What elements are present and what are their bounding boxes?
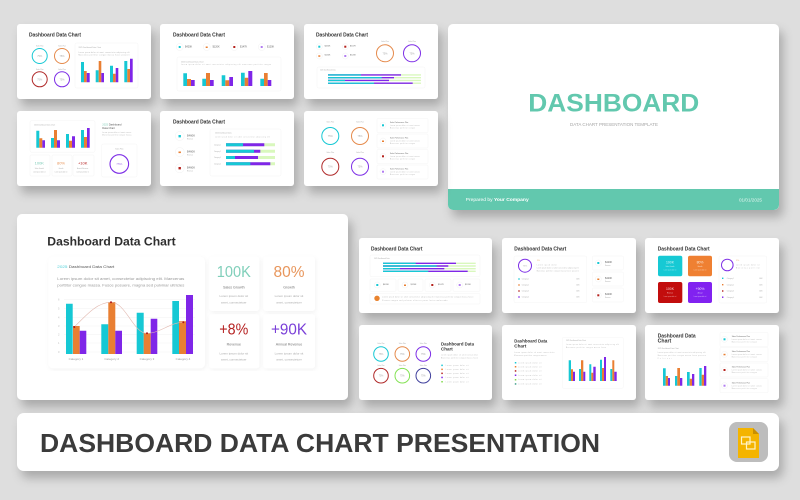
- slide thumbnail: six rings and list: Sales Plan: [377, 343, 385, 345]
- slide thumbnail: six rings and list: 75%: [421, 354, 426, 356]
- slide thumbnail: KPI row and bar chart: [160, 24, 294, 99]
- category labels: [69, 357, 191, 361]
- slide thumbnail: KPI column and horizontal bars: $460K: [187, 134, 195, 138]
- slide thumbnail: coloured KPI tiles and list: Dashboard Data Chart: [658, 247, 710, 253]
- slide thumbnail: rings and bar chart: Lorem ipsum dolor sit amet consectetur adipiscing elit: [78, 51, 130, 54]
- KPI card: annual revenue: [263, 314, 315, 368]
- slide thumbnail: bar chart, KPI trio and ring: Maecenas porttitor congue massa: [102, 134, 132, 136]
- slide thumbnail: six rings and list: Sales Plan: [399, 365, 406, 367]
- slide thumbnail: coloured KPI tiles and list: Revenue: [667, 292, 673, 294]
- slide thumbnail: ring with list and KPI column: 100K: [576, 291, 580, 293]
- slide thumbnail: KPI column and horizontal bars: Category 2: [214, 150, 221, 153]
- slide thumbnail: stacked bars, KPI row and note: $147K: [438, 284, 444, 286]
- y axis labels: 5: [58, 307, 60, 311]
- slide thumbnail: six rings and list: Lorem ipsum dolor sit: [446, 380, 469, 384]
- slide thumbnail: rings and text rows: Sales Performance Plan: [390, 168, 408, 170]
- slide thumbnail: bar chart and text rows: Maecenas porttitor congue: [732, 371, 757, 374]
- y axis labels: 4: [58, 315, 60, 319]
- slide thumbnail: stacked bars, KPI row and note: $120K: [410, 284, 417, 286]
- slide thumbnail: ring with list and KPI column: Revenue: [605, 297, 611, 299]
- slide thumbnail: coloured KPI tiles and list: Lorem ipsum dolor sit: [664, 295, 677, 298]
- slide thumbnail: KPI column and horizontal bars: $460K: [187, 166, 195, 170]
- slide thumbnail: six rings and list: Dashboard Data: [441, 341, 475, 346]
- slide thumbnail: rings and text rows: Sales Plan: [326, 152, 334, 154]
- KPI card: revenue: Lorem ipsum dolor sit: [219, 351, 248, 355]
- KPI card: growth: 80%: [274, 264, 305, 281]
- slide thumbnail: ring with list and KPI column: 75%: [523, 266, 527, 268]
- slide thumbnail: KPI column and horizontal bars: Category 4: [214, 162, 221, 166]
- slide thumbnail: six rings and list: 75%: [379, 354, 383, 356]
- slide thumbnail: coloured KPI tiles and list: Annual: [698, 292, 703, 294]
- slide thumbnail: bar chart, KPI trio and ring: 2025 Dashboard: [102, 122, 122, 126]
- slide thumbnail: KPI column and horizontal bars: [160, 111, 294, 186]
- slide thumbnail: six rings and list: Sales Plan: [399, 343, 406, 345]
- slide thumbnail: KPI column and horizontal bars: Lorem ipsum dolor sit amet consectetur adipiscing elit: [215, 136, 271, 138]
- slide thumbnail: bar chart, KPI trio and ring: Sales Growth: [35, 167, 44, 170]
- slide thumbnail: six rings and list: 75%: [400, 376, 405, 378]
- category labels: Category 2: [104, 357, 119, 361]
- slide thumbnail: bar chart, KPI trio and ring: Lorem ipsum dolor sit: [55, 170, 68, 174]
- slide thumbnail: KPI, rings and stacked bars: [304, 24, 438, 99]
- slide thumbnail: list and five-group bar chart: Lorem ipsum dolor sit: [518, 382, 542, 386]
- slide thumbnail: ring with list and KPI column: $420K: [605, 277, 613, 280]
- slide thumbnail: KPI row and bar chart: $120K: [212, 45, 220, 48]
- featured slide heading: Dashboard Data Chart: [47, 235, 176, 249]
- title slide footer band: [448, 189, 779, 210]
- chart description: Lorem ipsum dolor sit amet, consectetur adipiscing elit. Maecenas: [57, 277, 185, 281]
- slide thumbnail: KPI column and horizontal bars: Dashboard Data Chart: [173, 120, 225, 126]
- footer presenter text: Prepared by Your Company: [466, 197, 529, 203]
- slide thumbnail: six rings and list: Sales Plan: [420, 343, 427, 345]
- y axis labels: 1: [58, 341, 60, 345]
- panel: bar and line chart: [48, 257, 205, 368]
- slide thumbnail: KPI, rings and stacked bars: 75%: [409, 52, 415, 55]
- slide thumbnail: coloured KPI tiles and list: [645, 238, 779, 313]
- title slide: [448, 24, 779, 210]
- chart heading: 2025 Dashboard Data Chart: [57, 265, 115, 269]
- slide thumbnail: bar chart, KPI trio and ring: Lorem ipsum dolor sit: [33, 170, 46, 174]
- slide thumbnail: rings and bar chart: Dashboard Data Chart: [29, 33, 81, 39]
- slide thumbnail: bar chart and text rows: Pulvinar: [658, 358, 672, 360]
- slide thumbnail: six rings and list: 75%: [379, 376, 383, 378]
- slide thumbnail: rings and bar chart: 75%: [37, 78, 43, 81]
- slide thumbnail: six rings and list: [359, 325, 492, 400]
- slide thumbnail: rings and text rows: Lorem ipsum dolor sit amet consec: [390, 140, 420, 142]
- category labels: Category 4: [176, 357, 191, 361]
- slide thumbnail: stacked bars, KPI row and note: 2025 Dashboard Data: [374, 257, 390, 260]
- KPI card: sales growth: 100K: [217, 264, 251, 281]
- slide thumbnail: bar chart and text rows: Sales Performance Plan: [732, 366, 750, 369]
- slide thumbnail: ring with list and KPI column: Category 1: [522, 278, 529, 281]
- slide thumbnail: KPI row and bar chart: 2025 Dashboard Data Chart: [181, 60, 204, 64]
- slide thumbnail: coloured KPI tiles and list: Lorem ipsum dolor sit: [694, 268, 707, 272]
- KPI card: revenue: [209, 314, 259, 368]
- slide thumbnail: ring with list and KPI column: Category 2: [522, 284, 529, 287]
- slide thumbnail: list and five-group bar chart: Lorem ipsum dolor sit: [518, 378, 542, 381]
- slide thumbnail: KPI column and horizontal bars: Revenue: [187, 154, 193, 156]
- slide thumbnail: coloured KPI tiles and list: +90%: [696, 287, 704, 291]
- slide thumbnail: coloured KPI tiles and list: 100K: [759, 284, 763, 286]
- KPI card: growth: Growth: [283, 286, 295, 290]
- slide thumbnail: six rings and list: Chart: [441, 346, 453, 351]
- slide thumbnail: KPI column and horizontal bars: 2025 Dashboard Data: [215, 132, 232, 134]
- orange bars: [73, 302, 186, 354]
- slide thumbnail: coloured KPI tiles and list: Lorem ipsum dolor sit: [736, 263, 761, 266]
- KPI card: revenue: +8%: [219, 321, 248, 338]
- slide thumbnail: KPI, rings and stacked bars: 75%: [382, 52, 388, 55]
- KPI card: sales growth: [209, 257, 259, 311]
- slide thumbnail: KPI, rings and stacked bars: $120K: [350, 54, 356, 56]
- slide thumbnail: bar chart, KPI trio and ring: Annual Revenue: [77, 167, 88, 170]
- y axis labels: [58, 298, 60, 354]
- slide thumbnail: rings and text rows: Maecenas porttitor congue: [390, 126, 415, 130]
- slide thumbnail: coloured KPI tiles and list: Lorem ipsum dolor sit: [694, 295, 707, 298]
- KPI card: sales growth: amet, consectetuer: [221, 300, 247, 304]
- slide thumbnail: KPI, rings and stacked bars: $420K: [324, 46, 331, 48]
- slide thumbnail: bar chart and text rows: Maecenas porttitor congue: [732, 387, 757, 390]
- slide thumbnail: coloured KPI tiles and list: 100K: [666, 260, 675, 264]
- slide thumbnail: KPI column and horizontal bars: Category 1: [214, 144, 221, 146]
- slide thumbnail: coloured KPI tiles and list: Growth: [698, 265, 703, 268]
- slide thumbnail: ring with list and KPI column: Lorem ipsum dolor sit amet consectetur adipiscing elit: [537, 266, 579, 269]
- slide thumbnail: rings and text rows: Sales Plan: [356, 152, 364, 154]
- slide thumbnail: list and five-group bar chart: [502, 325, 636, 400]
- slide thumbnail: stacked bars, KPI row and note: $120K: [465, 284, 471, 286]
- slide thumbnail: ring with list and KPI column: $420K: [605, 261, 613, 264]
- KPI card: sales growth: Lorem ipsum dolor sit: [219, 294, 248, 298]
- category labels: Category 3: [140, 357, 155, 361]
- slide thumbnail: six rings and list: Maecenas porttitor congue massa fusce: [441, 356, 478, 360]
- slide thumbnail: bar chart, KPI trio and ring: [17, 111, 151, 186]
- slide thumbnail: rings and text rows: Sales Performance Plan: [390, 152, 408, 155]
- slide thumbnail: rings and text rows: Sales Performance Plan: [390, 121, 408, 124]
- KPI card: growth: amet, consectetuer: [276, 300, 302, 304]
- slide thumbnail: rings and bar chart: 75%: [59, 78, 65, 81]
- slide thumbnail: KPI row and bar chart: $120K: [267, 45, 275, 48]
- slide thumbnail: bar chart, KPI trio and ring: Growth: [59, 167, 64, 170]
- slide thumbnail: ring with list and KPI column: 100K: [576, 285, 580, 287]
- slide thumbnail: rings and bar chart: 2025 Dashboard Data Chart: [78, 46, 101, 49]
- KPI card: annual revenue: +90K: [271, 321, 308, 338]
- chart description: porttitor congue massa. Fusce posuere, magna sed pulvinar ultricies: [57, 284, 185, 288]
- slide thumbnail: bar chart and text rows: Chart: [658, 339, 672, 345]
- slide thumbnail: bar chart and text rows: Maecenas porttitor congue: [732, 340, 757, 344]
- slide thumbnail: ring with list and KPI column: Maecenas porttitor congue massa fusce posuere: [537, 270, 579, 273]
- slide thumbnail: rings and bar chart: Sales Plan: [58, 46, 66, 48]
- slide thumbnail: KPI, rings and stacked bars: Sales Plan: [408, 41, 416, 43]
- trend points: [73, 301, 184, 334]
- slide thumbnail: bar chart, KPI trio and ring: +10K: [78, 160, 88, 166]
- slide thumbnail: coloured KPI tiles and list: 100K: [759, 291, 763, 293]
- slide thumbnail: list and five-group bar chart: Maecenas porttitor congue massa fusce: [566, 346, 606, 349]
- slide thumbnail: list and five-group bar chart: Chart: [514, 344, 527, 349]
- cyan bars: [66, 301, 179, 354]
- slide thumbnail: bar chart and text rows: Lorem ipsum dolor sit amet consec: [732, 369, 762, 372]
- slide thumbnail: ring with list and KPI column: 100K: [576, 279, 580, 281]
- KPI card: growth: Lorem ipsum dolor sit: [275, 294, 304, 298]
- slide thumbnail: stacked bars, KPI row and note: [359, 238, 492, 313]
- slide thumbnail: KPI column and horizontal bars: Revenue: [187, 138, 193, 140]
- slide thumbnail: bar chart, KPI trio and ring: 75%: [116, 162, 123, 166]
- slide thumbnail: ring with list and KPI column: Category 4: [522, 296, 529, 299]
- title slide subtitle: DATA CHART PRESENTATION TEMPLATE: [570, 122, 658, 127]
- slide thumbnail: six rings and list: 75%: [421, 376, 426, 378]
- slide thumbnail: ring with list and KPI column: Lorem ipsum dolor: [537, 264, 557, 266]
- slide thumbnail: ring with list and KPI column: Revenue: [605, 265, 611, 267]
- slide thumbnail: list and five-group bar chart: Maecenas porttitor congue massa: [514, 354, 547, 357]
- slide thumbnail: KPI, rings and stacked bars: Sales Plan: [381, 41, 389, 43]
- slide thumbnail: stacked bars, KPI row and note: Posuere magna sed pulvinar ultricies purus lectus malesuada: [382, 299, 447, 302]
- slide thumbnail: ring with list and KPI column: 1%: [537, 260, 540, 262]
- slide thumbnail: bar chart and text rows: [645, 325, 779, 400]
- slide thumbnail: stacked bars, KPI row and note: Lorem ipsum dolor sit amet consectetur adipiscing elit maecenas porttitor congue massa fusce: [382, 296, 473, 298]
- slide thumbnail: six rings and list: Lorem ipsum dolor sit: [446, 364, 469, 367]
- slide thumbnail: bar chart and text rows: Lorem ipsum dolor sit amet consectetur adipiscing elit: [658, 351, 706, 354]
- slide thumbnail: list and five-group bar chart: Lorem ipsum dolor sit: [518, 365, 542, 368]
- slide thumbnail: list and five-group bar chart: Lorem ipsum dolor sit amet consectetur adipiscing elit: [566, 343, 620, 346]
- slide thumbnail: bar chart and text rows: 2025 Dashboard Data Chart: [658, 347, 679, 350]
- slide thumbnail: six rings and list: 75%: [400, 354, 405, 356]
- slide thumbnail: bar chart and text rows: Lorem ipsum dolor sit amet consec: [732, 384, 762, 387]
- slide thumbnail: bar chart, KPI trio and ring: Lorem ipsum dolor sit: [76, 170, 90, 174]
- slide thumbnail: bar chart and text rows: Lorem ipsum dolor sit amet consec: [732, 338, 762, 341]
- y axis labels: 0: [58, 350, 60, 354]
- slide thumbnail: rings and bar chart: Maecenas porttitor congue massa fusce posuere: [78, 54, 130, 56]
- slide thumbnail: rings and text rows: Lorem ipsum dolor sit amet consec: [390, 155, 420, 158]
- slide thumbnail: bar chart and text rows: Sales Performance Plan: [732, 350, 750, 353]
- slide thumbnail: rings and text rows: Maecenas porttitor congue: [390, 142, 415, 145]
- slide thumbnail: KPI row and bar chart: $420K: [185, 45, 193, 48]
- slide thumbnail: rings and text rows: 75%: [357, 135, 363, 138]
- slide thumbnail: coloured KPI tiles and list: Sales Growth: [665, 265, 675, 268]
- slide thumbnail: bar chart, KPI trio and ring: 80%: [57, 160, 65, 166]
- slide thumbnail: coloured KPI tiles and list: 100K: [759, 297, 763, 299]
- slide thumbnail: KPI, rings and stacked bars: Dashboard Data Chart: [316, 33, 368, 39]
- slide thumbnail: ring with list and KPI column: Dashboard Data Chart: [514, 247, 567, 253]
- purple bars: [80, 295, 193, 354]
- slide thumbnail: rings and text rows: 75%: [357, 166, 363, 169]
- y axis labels: 6: [58, 298, 60, 302]
- slide thumbnail: rings and text rows: Sales Performance Plan: [390, 136, 408, 140]
- slide thumbnail: bar chart, KPI trio and ring: Sales Plan: [115, 148, 123, 150]
- slide thumbnail: KPI, rings and stacked bars: $147K: [350, 46, 356, 48]
- footer date: 01/01/2025: [739, 198, 763, 202]
- KPI card: annual revenue: Lorem ipsum dolor sit: [275, 351, 304, 355]
- slide thumbnail: ring with list and KPI column: 100K: [576, 297, 580, 299]
- slide thumbnail: rings and bar chart: 75%: [59, 55, 65, 58]
- slide thumbnail: list and five-group bar chart: Lorem ipsum dolor sit: [518, 370, 542, 372]
- slide thumbnail: bar chart and text rows: Maecenas porttitor congue: [732, 356, 757, 358]
- slide thumbnail: list and five-group bar chart: Lorem ipsum dolor sit: [518, 374, 542, 377]
- slide thumbnail: coloured KPI tiles and list: Category 3: [727, 290, 734, 293]
- slide thumbnail: six rings and list: Lorem ipsum dolor sit: [446, 368, 469, 371]
- slide thumbnail: rings and bar chart: Sales Plan: [36, 69, 44, 71]
- slide thumbnail: six rings and list: Sales Plan: [377, 365, 385, 367]
- KPI card: revenue: amet, consectetuer: [221, 358, 247, 362]
- slide thumbnail: KPI row and bar chart: $147K: [240, 45, 248, 48]
- slide thumbnail: coloured KPI tiles and list: 100K: [759, 278, 763, 280]
- slide thumbnail: bar chart and text rows: Maecenas porttitor congue massa fusce posuere: [658, 354, 706, 357]
- slide thumbnail: rings and text rows: [304, 111, 438, 186]
- slide thumbnail: bar chart and text rows: Dashboard Data: [658, 333, 696, 339]
- slide thumbnail: ring with list and KPI column: Category 3: [522, 290, 529, 293]
- KPI card: annual revenue: amet, consectetuer: [276, 358, 302, 362]
- slide thumbnail: bar chart, KPI trio and ring: Data Chart: [102, 126, 115, 130]
- slide thumbnail: coloured KPI tiles and list: Category 4: [727, 296, 734, 299]
- slide thumbnail: rings and text rows: Sales Plan: [356, 122, 364, 124]
- slide thumbnail: KPI column and horizontal bars: $460K: [187, 150, 195, 154]
- featured slide: [17, 214, 348, 400]
- slide thumbnail: rings and text rows: Lorem ipsum dolor sit amet consec: [390, 170, 420, 174]
- banner title: DASHBOARD DATA CHART PRESENTATION: [40, 430, 600, 458]
- slide thumbnail: bar chart and text rows: Lorem ipsum dolor sit amet consec: [732, 353, 762, 356]
- slide thumbnail: coloured KPI tiles and list: Category 1: [727, 277, 734, 280]
- chart description: [57, 277, 185, 288]
- KPI card: annual revenue: Annual Revenue: [276, 342, 302, 346]
- slide thumbnail: coloured KPI tiles and list: 1%: [736, 260, 739, 262]
- trend line: [74, 302, 183, 333]
- slide thumbnail: KPI row and bar chart: Dashboard Data Chart: [173, 33, 225, 39]
- slide thumbnail: coloured KPI tiles and list: Maecenas porttitor: [736, 267, 761, 270]
- slide thumbnail: ring with list and KPI column: $420K: [605, 293, 613, 296]
- KPI card: sales growth: Sales Growth: [223, 286, 245, 290]
- slide thumbnail: bar chart, KPI trio and ring: 2025 Dashboard Data Chart: [34, 124, 56, 126]
- slide thumbnail: rings and text rows: Maecenas porttitor congue: [390, 158, 415, 160]
- slide thumbnail: six rings and list: Lorem ipsum dolor sit amet consectetur: [441, 354, 479, 356]
- slide thumbnail: bar chart, KPI trio and ring: 100K: [35, 160, 44, 166]
- slide thumbnail: rings and text rows: 75%: [328, 135, 334, 138]
- slide thumbnail: list and five-group bar chart: 2025 Dashboard Data Chart: [566, 339, 586, 342]
- slide thumbnail: stacked bars, KPI row and note: Dashboard Data Chart: [371, 247, 423, 253]
- slide thumbnail: six rings and list: Lorem ipsum dolor sit: [446, 372, 469, 375]
- category labels: Category 1: [69, 357, 84, 361]
- slide thumbnail: KPI column and horizontal bars: Category 3: [214, 156, 221, 159]
- title slide heading: DASHBOARD: [528, 90, 699, 118]
- slide thumbnail: coloured KPI tiles and list: 80%: [697, 260, 703, 264]
- slide thumbnail: rings and text rows: 75%: [328, 166, 334, 169]
- slide thumbnail: bar chart and text rows: Sales Performance Plan: [732, 381, 750, 384]
- slide thumbnail: rings and bar chart: Sales Plan: [58, 69, 66, 71]
- slide thumbnail: rings and text rows: Lorem ipsum dolor sit amet consec: [390, 124, 420, 127]
- slide thumbnail: KPI row and bar chart: Lorem ipsum dolor sit amet consectetur adipiscing elit maecenas porttitor congue: [181, 63, 271, 66]
- slide thumbnail: rings and bar chart: Sales Plan: [36, 46, 44, 48]
- slide thumbnail: rings and bar chart: 75%: [37, 55, 43, 58]
- slide thumbnail: bar chart and text rows: Sales Performance Plan: [732, 335, 750, 338]
- y axis labels: 3: [58, 324, 60, 328]
- slide thumbnail: six rings and list: Sales Plan: [420, 365, 427, 367]
- slide thumbnail: rings and text rows: Sales Plan: [326, 122, 334, 124]
- slide thumbnail: KPI, rings and stacked bars: $120K: [324, 54, 331, 56]
- slide thumbnail: bar chart, KPI trio and ring: Lorem ipsum dolor sit amet consec: [102, 131, 132, 134]
- slide thumbnail: list and five-group bar chart: Lorem ipsum dolor sit amet consectetur: [514, 351, 555, 354]
- slide thumbnail: coloured KPI tiles and list: Lorem ipsum dolor sit: [664, 268, 677, 272]
- slide thumbnail: KPI, rings and stacked bars: 2025 Dashboard Data: [320, 68, 336, 72]
- slide thumbnail: rings and bar chart: [17, 24, 151, 99]
- slide thumbnail: ring with list and KPI column: [502, 238, 636, 313]
- bottom title banner: [17, 413, 779, 471]
- y axis labels: 2: [58, 333, 60, 337]
- slide thumbnail: list and five-group bar chart: Lorem ipsum dolor sit: [518, 361, 542, 364]
- icon: slides app: [729, 422, 768, 462]
- slide thumbnail: stacked bars, KPI row and note: $420K: [383, 284, 389, 286]
- slide thumbnail: rings and text rows: Maecenas porttitor congue: [390, 173, 415, 176]
- KPI card: growth: [263, 257, 315, 311]
- slide thumbnail: coloured KPI tiles and list: Category 2: [727, 283, 734, 286]
- KPI card: revenue: Revenue: [227, 342, 241, 346]
- slide thumbnail: KPI column and horizontal bars: Revenue: [187, 170, 193, 172]
- slide thumbnail: coloured KPI tiles and list: 100K: [666, 287, 675, 291]
- slide thumbnail: ring with list and KPI column: Revenue: [605, 281, 611, 283]
- slide thumbnail: six rings and list: Lorem ipsum dolor sit: [446, 376, 469, 379]
- slide thumbnail: list and five-group bar chart: Dashboard Data: [514, 339, 548, 344]
